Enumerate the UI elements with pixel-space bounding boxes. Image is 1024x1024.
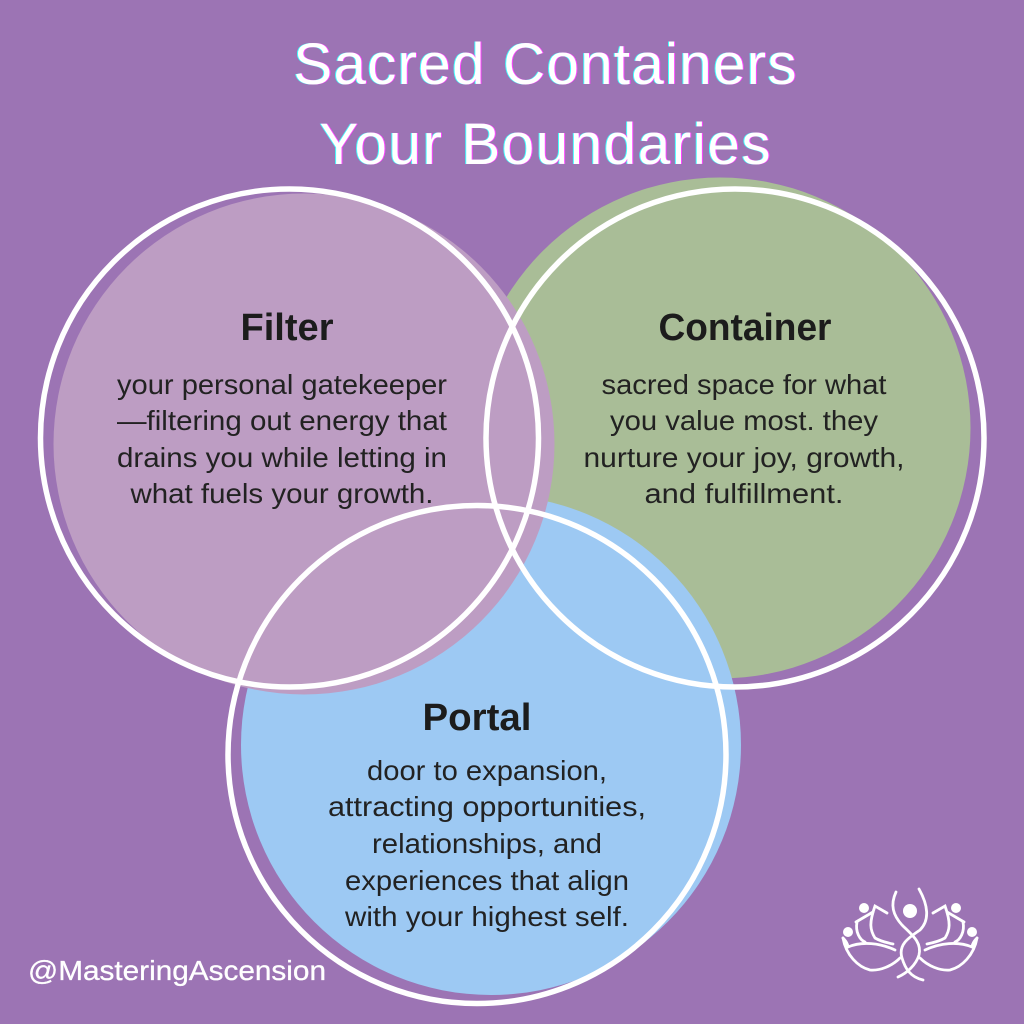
circle fill: filter [54, 194, 554, 694]
body: filter: drains you while letting in [117, 442, 447, 473]
heading: filter: Filter [240, 307, 334, 349]
handle: @MasteringAscension [28, 955, 326, 986]
heading: container: Container [658, 307, 832, 349]
body: container: sacred space for what [602, 369, 887, 400]
title: Your Boundaries [320, 112, 770, 177]
body: portal: with your highest self. [344, 901, 629, 932]
ring: portal [228, 506, 726, 1004]
body: filter: your personal gatekeeper [117, 369, 447, 400]
panel text: filter [117, 307, 447, 509]
body: container: nurture your joy, growth, [584, 442, 904, 473]
circle fill: container [470, 178, 970, 678]
panel text: container [584, 307, 904, 509]
body: portal: relationships, and [372, 828, 602, 859]
body: portal: attracting opportunities, [328, 791, 646, 822]
ring: container [486, 189, 984, 687]
title: Your Boundaries [318, 112, 770, 177]
ring: filter [40, 189, 538, 687]
panel text: portal [328, 697, 646, 932]
title: Sacred Containers [292, 32, 796, 97]
body: container: you value most. they [610, 405, 878, 436]
title: Your Boundaries [320, 112, 772, 177]
title: Sacred Containers [294, 32, 796, 97]
body: filter [117, 369, 447, 509]
icon: lotus logo [843, 889, 977, 980]
title: Sacred Containers [294, 32, 798, 97]
body: filter: —filtering out energy that [117, 405, 447, 436]
body: portal: experiences that align [345, 865, 629, 896]
circle fill: portal [241, 495, 741, 995]
body: portal [328, 755, 646, 932]
heading: portal: Portal [422, 697, 532, 739]
title [292, 32, 798, 177]
body: container: and fulfillment. [644, 478, 844, 509]
body: portal: door to expansion, [367, 755, 607, 786]
body: container [584, 369, 904, 509]
body: filter: what fuels your growth. [129, 478, 434, 509]
